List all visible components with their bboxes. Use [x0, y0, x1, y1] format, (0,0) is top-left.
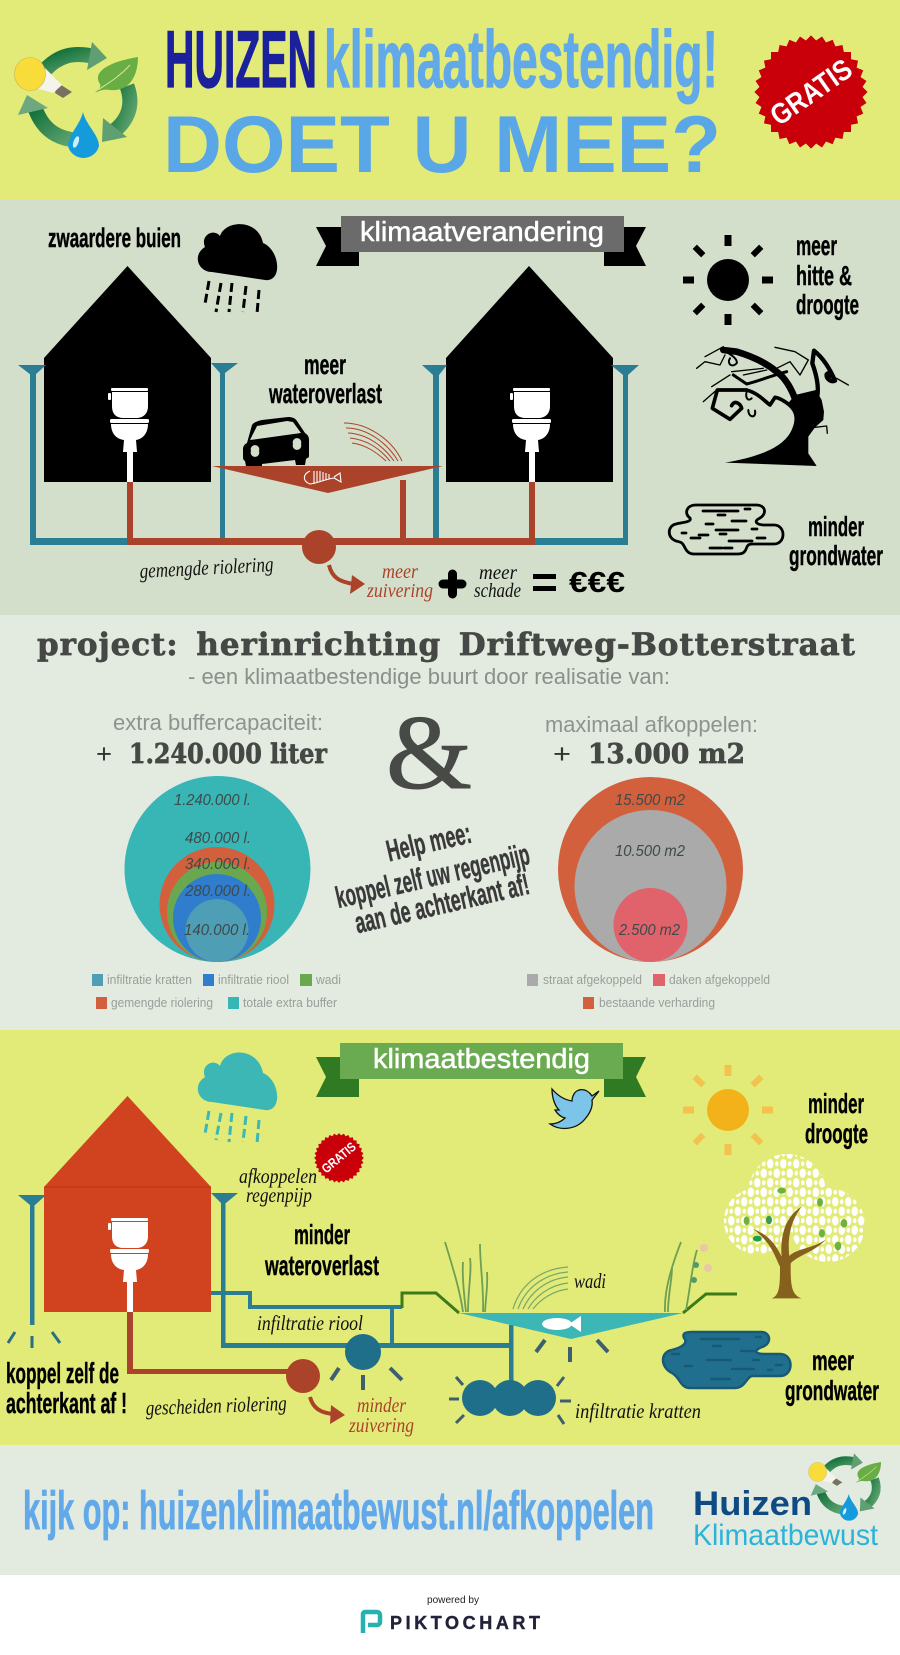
text: minder zuivering: zuivering: [348, 1413, 414, 1437]
icon: dead tree: [697, 347, 848, 466]
callout: help mee: aan de achterkant af!: [352, 868, 533, 940]
legend: buffer: infiltratie riool: [218, 972, 289, 987]
text: minder zuivering: [348, 1393, 414, 1437]
chart: buffer circles: 1.240.000 l.: [174, 792, 251, 809]
text: afkoppelen regenpijp: afkoppelen: [239, 1164, 317, 1188]
icon: groundwater outline: [669, 505, 783, 554]
legend: afkoppelen: straat afgekoppeld: [543, 972, 642, 987]
text: minder droogte: minder: [808, 1088, 864, 1119]
icon: green tree: [724, 1154, 865, 1298]
text: meer grondwater: [785, 1345, 879, 1406]
text: minder grondwater: [789, 511, 883, 571]
text: buffercapaciteit: 1.240.000 liter: [129, 739, 328, 770]
pipes: brown sewer: [127, 1312, 320, 1393]
arcs: wadi spray: [513, 1267, 568, 1309]
text: gescheiden riolering: gescheiden riolering: [145, 1391, 287, 1420]
text: afkoppelen: 13.000 m2: [588, 739, 745, 770]
text: koppel zelf: koppel zelf de: [6, 1358, 119, 1390]
banner: klimaatbestendig: [316, 1043, 646, 1097]
panel: piktochart footer: [0, 1575, 900, 1655]
pipes: mixed sewer: [127, 480, 535, 564]
text: minder droogte: [805, 1088, 868, 1149]
chart: buffer circles: 140.000 l.: [184, 922, 250, 939]
text: euro: €€€: [569, 567, 625, 599]
callout: help mee: Help mee:: [383, 817, 475, 868]
subtitle: - een klimaatbestendige buurt door realisatie van:: [188, 664, 670, 689]
icon: plus: [443, 574, 462, 594]
badge: gratis: [754, 35, 868, 149]
banner: klimaatverandering: [316, 216, 646, 266]
icon: toilet red house: [108, 1218, 149, 1312]
text: minder wateroverlast: wateroverlast: [264, 1250, 379, 1281]
text: afkoppelen: +: [553, 739, 571, 769]
text: meer schade: meer: [479, 562, 517, 584]
icon: groundwater blue: [663, 1332, 790, 1388]
logo: huizen klimaatbewust: Klimaatbewust: [693, 1519, 879, 1552]
logo: huizen klimaatbewust: [693, 1453, 881, 1552]
text: meer hitte en droogte: [796, 230, 859, 320]
chart: buffer circles: 480.000 l.: [185, 830, 251, 847]
chart: afkoppelen circles: [558, 777, 743, 962]
heading: huizen: HUIZEN: [165, 15, 317, 105]
text: wadi: wadi: [574, 1269, 606, 1293]
house 2: [446, 266, 613, 482]
wadi: polluted: [212, 466, 443, 493]
arrow: naar zuivering: [329, 565, 365, 594]
icon: reeds left: [445, 1242, 487, 1312]
logo: huizen klimaatbewust: Huizen: [693, 1485, 812, 1523]
text: minder zuivering: minder: [357, 1393, 407, 1417]
text: infiltratie kratten: infiltratie kratten: [575, 1399, 701, 1423]
text: meer zuivering: meer: [382, 561, 418, 583]
text: buffercapaciteit: extra buffercapaciteit:: [113, 710, 323, 735]
text: minder wateroverlast: minder: [294, 1219, 350, 1250]
icon: fish skeleton: [304, 471, 341, 484]
panel: klimaatverandering: [0, 200, 900, 615]
text: meer hitte en droogte: droogte: [796, 289, 859, 320]
legend: buffer: infiltratie kratten: [107, 972, 192, 987]
icon: twitter bird: [550, 1089, 599, 1128]
text: powered by: powered by: [427, 1595, 479, 1606]
text: afkoppelen regenpijp: regenpijp: [246, 1183, 312, 1207]
icon: reeds and flowers right: [665, 1242, 712, 1312]
icon: infiltration crates: [462, 1380, 556, 1416]
legend: buffer: gemengde riolering: [111, 995, 213, 1010]
text: meer wateroverlast: [268, 349, 382, 409]
text: meer hitte en droogte: meer: [796, 230, 837, 261]
legend: buffer: wadi: [315, 972, 341, 987]
text: buffercapaciteit: [96, 710, 328, 770]
panel: project: [0, 615, 900, 1030]
text: koppel zelf: [6, 1358, 127, 1420]
legend: afkoppelen: bestaande verharding: [599, 995, 715, 1010]
chart: buffer circles: [124, 776, 310, 962]
text: meer grondwater: meer: [812, 1345, 854, 1376]
panel: footer link: [0, 1445, 900, 1575]
text: buffercapaciteit: +: [96, 739, 112, 769]
arrow: minder zuivering: [310, 1397, 345, 1424]
legend: afkoppelen: daken afgekoppeld: [669, 972, 770, 987]
badge: gratis: GRATIS: [765, 53, 858, 132]
wadi: clean water: [459, 1313, 683, 1339]
icon: orange sun: [683, 1065, 773, 1155]
text: infiltratie riool: infiltratie riool: [257, 1311, 363, 1335]
text: afkoppelen: [545, 712, 758, 770]
icon: fish: [542, 1316, 581, 1332]
icon: piktochart logo: [363, 1612, 380, 1633]
text: piktochart: PIKTOCHART: [390, 1613, 540, 1633]
text: afkoppelen regenpijp: [239, 1164, 317, 1207]
panel: klimaatbestendig: [0, 1030, 900, 1445]
legend: buffer: totale extra buffer: [243, 995, 338, 1010]
chart: afkoppelen circles: 2.500 m2: [618, 922, 680, 939]
banner: klimaatverandering: klimaatverandering: [360, 216, 604, 247]
text: meer zuivering: [366, 561, 433, 602]
icon: teal rain cloud: [198, 1053, 277, 1144]
text: minder grondwater: minder: [808, 511, 864, 542]
panel: header: [0, 0, 900, 200]
text: koppel zelf: achterkant af !: [6, 1388, 127, 1420]
text: meer schade: schade: [474, 580, 521, 602]
chart: afkoppelen circles: 10.500 m2: [615, 843, 685, 860]
text: zwaardere buien: zwaardere buien: [48, 223, 181, 253]
heading: project: project: herinrichting Driftweg-Botterstraat: [37, 627, 856, 663]
badge: small gratis: GRATIS: [319, 1139, 359, 1176]
text: meer wateroverlast: wateroverlast: [268, 378, 382, 409]
chart: buffer circles: 280.000 l.: [184, 883, 251, 900]
text: gemengde riolering: gemengde riolering: [139, 552, 274, 583]
icon: toilet 1: [108, 388, 149, 482]
house 1: [44, 266, 211, 482]
text: meer schade: [474, 562, 521, 602]
house: red: [44, 1096, 211, 1312]
legend: afkoppelen: [527, 972, 770, 1010]
chart: afkoppelen circles: 15.500 m2: [615, 792, 685, 809]
text: minder wateroverlast: [264, 1219, 379, 1281]
icon: equals: [533, 574, 556, 591]
ground line: wadi: [402, 1293, 737, 1313]
chart: buffer circles: 340.000 l.: [185, 856, 251, 873]
legend: buffer: [92, 972, 341, 1010]
heading: doet u mee: DOET U MEE?: [163, 100, 721, 190]
text: meer hitte en droogte: hitte &: [796, 260, 852, 291]
text: meer wateroverlast: meer: [304, 349, 346, 380]
icon: toilet 2: [510, 388, 551, 482]
icon: sun: [683, 235, 773, 325]
icon: recycle logo: [14, 42, 138, 158]
icon: ampersand: &: [386, 694, 472, 811]
ticks: infiltration: [8, 1332, 608, 1424]
text: afkoppelen: maximaal afkoppelen:: [545, 712, 758, 737]
text: meer zuivering: zuivering: [366, 580, 433, 602]
arcs: water spray: [344, 423, 402, 461]
banner: klimaatbestendig: klimaatbestendig: [373, 1043, 590, 1074]
pipes: rainwater: [18, 363, 639, 545]
pipes: blue rainwater: [18, 1193, 514, 1385]
callout: help mee: koppel zelf uw regenpijp: [332, 838, 533, 915]
icon: rain cloud: [198, 224, 277, 314]
icon: car: [243, 417, 309, 466]
callout: help mee: [325, 805, 539, 943]
